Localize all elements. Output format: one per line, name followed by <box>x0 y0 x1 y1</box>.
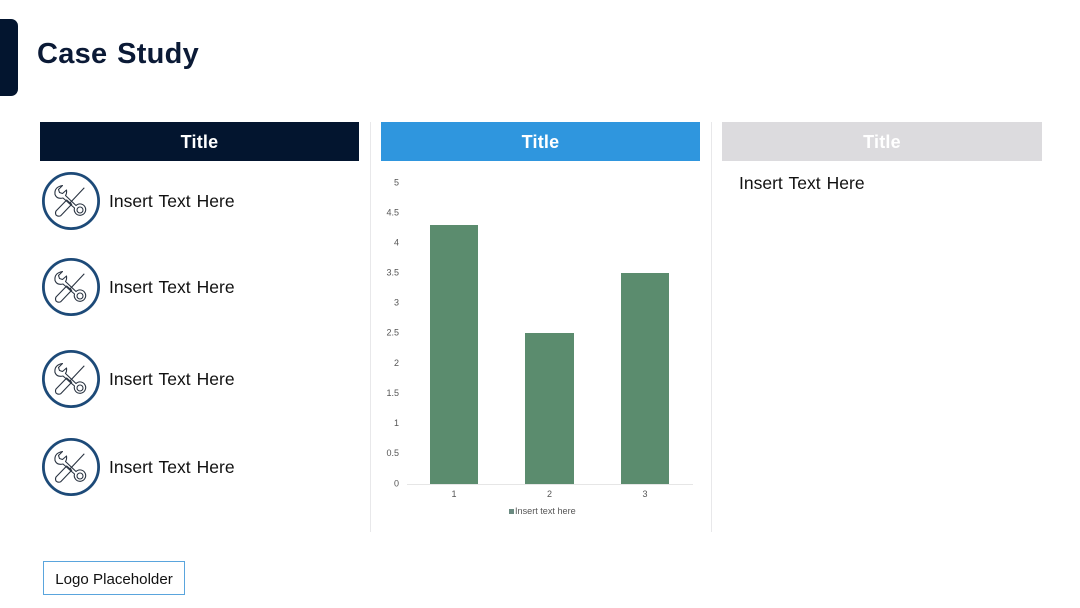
bar chart: 2.5 <box>386 328 399 338</box>
bar chart: Insert text here <box>515 506 576 516</box>
list item 2 <box>42 258 235 316</box>
logo placeholder <box>43 561 185 595</box>
bar chart <box>386 178 693 516</box>
bar chart: 2 <box>547 489 552 499</box>
bar chart: 5 <box>394 178 399 188</box>
list item 3: Insert Text Here <box>109 369 235 389</box>
list item 2: Insert Text Here <box>109 277 235 297</box>
bar chart: 0.5 <box>386 448 399 458</box>
bar chart: 4 <box>394 238 399 248</box>
bar chart: 1.5 <box>386 388 399 398</box>
list item 1: Insert Text Here <box>109 191 235 211</box>
header: middle column: Title <box>522 132 559 152</box>
title: Case Study <box>37 38 199 70</box>
header: middle column <box>381 122 700 161</box>
bar chart: 1 <box>394 418 399 428</box>
accent tab <box>0 19 18 96</box>
bar chart: 1 <box>451 489 457 499</box>
header: left column <box>40 122 359 161</box>
right column text: Insert Text Here <box>739 173 865 193</box>
list item 4 <box>42 438 235 496</box>
column divider right <box>711 122 712 532</box>
header: right column <box>722 122 1042 161</box>
bar chart: 0 <box>394 478 399 488</box>
column divider left <box>370 122 371 532</box>
header: left column: Title <box>181 132 218 152</box>
bar chart: 4.5 <box>386 208 399 218</box>
bar chart: 3 <box>394 298 399 308</box>
bar chart: 2 <box>394 358 399 368</box>
bar chart: 3.5 <box>386 268 399 278</box>
logo placeholder: Logo Placeholder <box>55 571 173 588</box>
header: right column: Title <box>863 132 901 152</box>
bar chart: 3 <box>642 489 648 499</box>
list item 4: Insert Text Here <box>109 457 235 477</box>
list item 3 <box>42 350 235 408</box>
list item 1 <box>42 172 235 230</box>
